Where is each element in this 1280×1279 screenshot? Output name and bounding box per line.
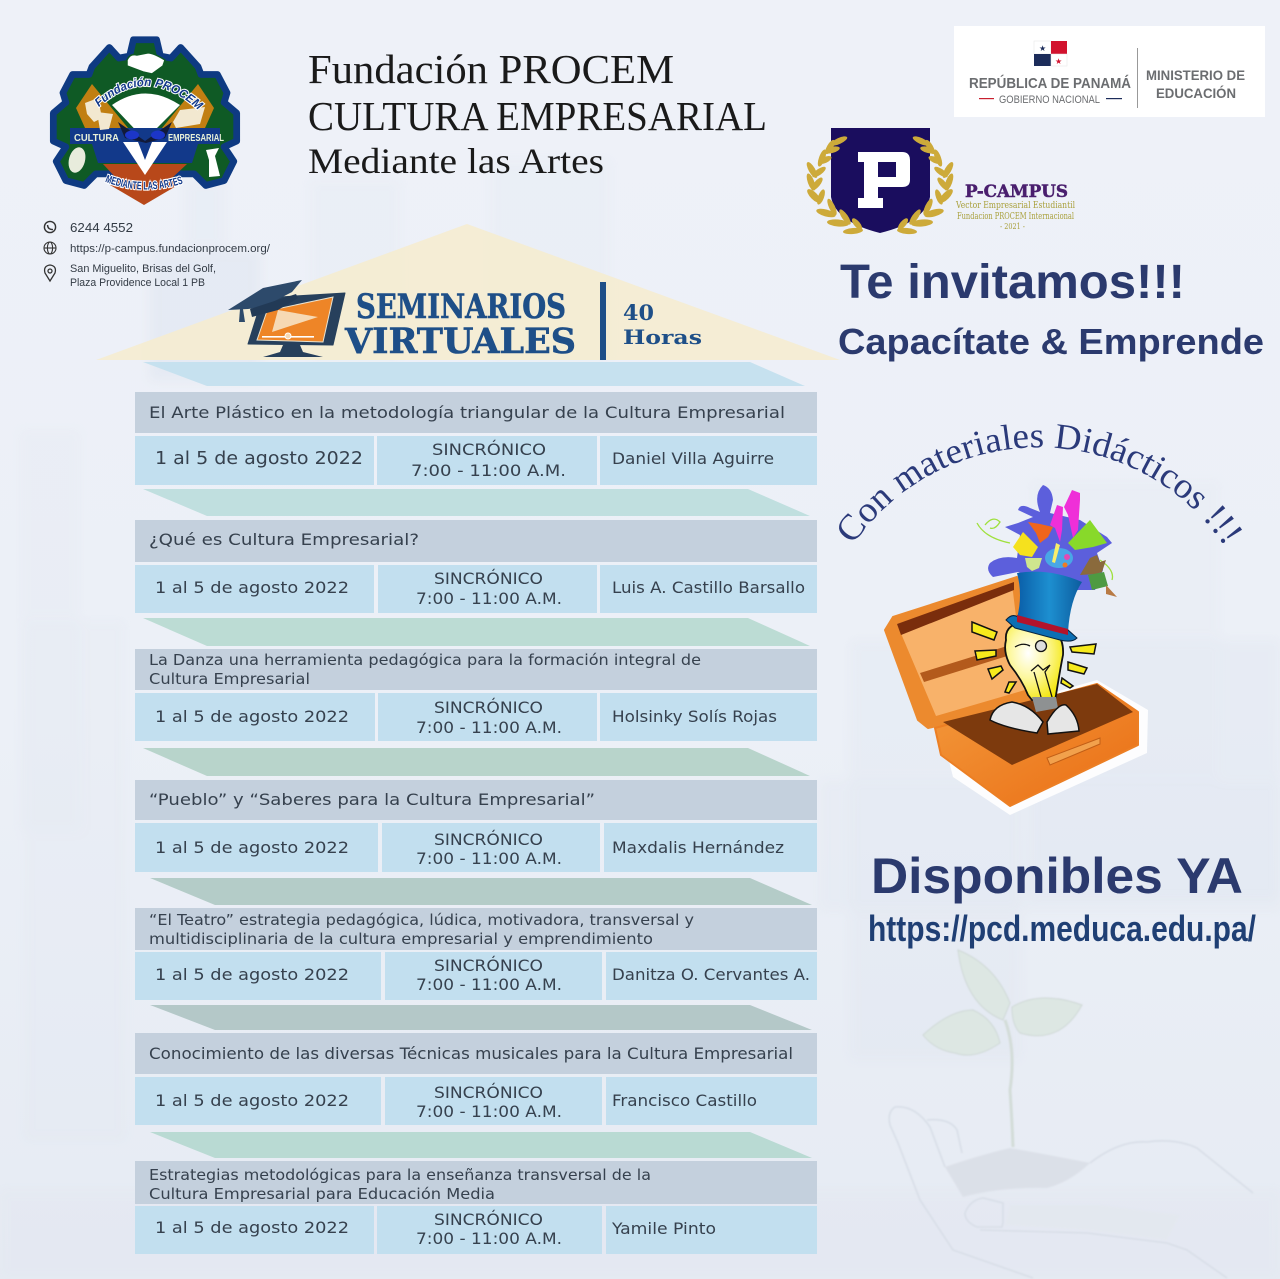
background sprout and hand [889, 950, 1253, 1278]
panel: seminar 1: SINCRÓNICO [432, 440, 546, 459]
white kite [112, 94, 180, 140]
suitcase clasp [1047, 738, 1100, 765]
CULTURA: CULTURA [74, 133, 119, 144]
bulb base [1032, 697, 1058, 712]
panel: seminar 5: “El Teatro” estrategia pedagógica, lúdica, motivadora, transversal y [149, 911, 694, 929]
panel: seminar 6: Conocimiento de las diversas Técnicas musicales para la Cultura Empresarial [149, 1044, 793, 1063]
P-Campus tagline [955, 201, 1075, 231]
roof triangle [96, 224, 840, 360]
panel: seminar 5: multidisciplinaria de la cultura empresarial y emprendimiento [149, 930, 653, 948]
Ministerio de Educación: MINISTERIO DE [1146, 67, 1245, 83]
panel: seminar 1: Daniel Villa Aguirre [612, 449, 774, 468]
panel: seminar 1 [135, 392, 817, 485]
panel: seminar 7: Cultura Empresarial para Educación Media [149, 1185, 495, 1203]
bulb rays [972, 622, 1096, 693]
lightbulb [1005, 622, 1063, 700]
panel: seminar 7: Yamile Pinto [611, 1219, 716, 1238]
letter P [858, 152, 910, 208]
shoes [990, 702, 1079, 734]
logo: Fundación PROCEM [50, 36, 240, 205]
heading: Seminarios Virtuales [344, 287, 576, 362]
screen [257, 297, 333, 342]
monitor frame [248, 293, 345, 345]
suitcase halo [940, 680, 1148, 815]
panel: seminar 2: SINCRÓNICO [434, 569, 543, 588]
heading: Fundación PROCEM: CULTURA EMPRESARIAL [308, 93, 767, 139]
panel: seminar 4: 7:00 - 11:00 A.M. [416, 849, 562, 868]
MEDIANTE LAS ARTES: MEDIANTE LAS ARTES [104, 174, 183, 191]
panel: seminar 3: 7:00 - 11:00 A.M. [416, 718, 562, 737]
panel: seminar 4: 1 al 5 de agosto 2022 [155, 838, 349, 857]
panel: seminar 7: 7:00 - 11:00 A.M. [416, 1229, 562, 1248]
panel: seminar 5: Danitza O. Cervantes A. [612, 965, 810, 984]
panel: seminar 6: Francisco Castillo [612, 1091, 757, 1110]
illustration: suitcase and lightbulb [885, 485, 1148, 815]
panel: seminar 5 [135, 908, 817, 1000]
subheading: Capacítate & Emprende: Capacítate & Emprende [838, 321, 1264, 362]
theatre masks [85, 98, 113, 130]
panel: seminar 3: Holsinky Solís Rojas [612, 707, 777, 726]
heading: Seminarios Virtuales: SEMINARIOS [356, 287, 566, 327]
P-Campus tagline: Vector Empresarial Estudiantil [955, 201, 1075, 211]
music notes [173, 107, 205, 128]
suitcase interior [943, 684, 1133, 765]
lid interior [897, 584, 1025, 716]
hand shading [1005, 1205, 1180, 1240]
heading: Te invitamos: Te invitamos!!! [840, 256, 1185, 309]
Panama flag [1034, 41, 1067, 66]
splash: orange jester [1028, 522, 1053, 543]
panel: seminar 2: Luis A. Castillo Barsallo [612, 578, 805, 597]
EMPRESARIAL: EMPRESARIAL [168, 133, 224, 144]
P-Campus tagline: - 2021 - [1000, 222, 1025, 231]
color splash [977, 485, 1117, 597]
logo: P-Campus [805, 128, 1075, 235]
panel: seminar 5: SINCRÓNICO [434, 956, 543, 975]
ochre triangles [76, 84, 214, 128]
panel: seminar 4 [135, 780, 817, 872]
address: San Miguelito, Brisas del Golf, [70, 263, 216, 275]
play button [272, 310, 318, 332]
splash: purple blob [988, 485, 1112, 590]
palette [66, 145, 88, 175]
graduation cap [228, 280, 302, 310]
band 7 [150, 1132, 812, 1158]
panel: seminar 2 [135, 520, 817, 613]
contact block: Plaza Providence Local 1 PB [70, 277, 205, 289]
hand outline [889, 1107, 1253, 1278]
40 Horas: 40 [623, 300, 654, 325]
splash: pale mask [1025, 558, 1042, 571]
heading: Seminarios Virtuales: VIRTUALES [344, 321, 576, 362]
panel: seminar 2: 7:00 - 11:00 A.M. [416, 589, 562, 608]
suitcase base [935, 684, 1138, 806]
red lower chevron [103, 164, 187, 205]
band 2 [143, 489, 810, 516]
Panama flag: ★ [1055, 57, 1062, 66]
Panama flag: ★ [1039, 44, 1046, 53]
navy band [70, 128, 220, 163]
phone: 6244 4552 [70, 221, 133, 235]
panel: seminar 4: “Pueblo” y “Saberes para la Cultura Empresarial” [149, 790, 595, 809]
Gobierno Nacional: GOBIERNO NACIONAL [999, 94, 1100, 106]
panel: seminar 5: 7:00 - 11:00 A.M. [416, 975, 562, 994]
panel: seminar 6: 7:00 - 11:00 A.M. [416, 1102, 562, 1121]
panel: seminar 5: 1 al 5 de agosto 2022 [155, 965, 349, 984]
panel: seminar 7: 1 al 5 de agosto 2022 [155, 1218, 349, 1237]
panel: seminar 3 [135, 649, 817, 741]
top hat [1006, 572, 1082, 641]
P-CAMPUS wordmark: P-CAMPUS [965, 182, 1068, 202]
gear [53, 40, 237, 185]
panel: seminar 1: 1 al 5 de agosto 2022 [155, 448, 363, 469]
panel: seminar 3: La Danza una herramienta pedagógica para la formación integral de [149, 651, 701, 669]
curved text: Con materiales Didácticos: Con materiales Didácticos !!! [839, 424, 1242, 543]
shield [831, 128, 930, 233]
band 3 [143, 618, 810, 646]
monitor stand [263, 345, 323, 357]
ribbon text Fundación PROCEM: Fundación PROCEM [94, 76, 206, 110]
heading: Fundación PROCEM [308, 46, 767, 181]
band 5 [150, 878, 812, 905]
icon: location pin [45, 265, 55, 281]
40 Horas: Horas [623, 325, 702, 349]
panel: seminar 7 [135, 1161, 817, 1254]
sprout leaves [923, 950, 1082, 1055]
band 6 [150, 1005, 812, 1030]
laurel [805, 134, 955, 235]
panel: seminar 3: SINCRÓNICO [434, 698, 543, 717]
owl face [123, 142, 167, 175]
splash: dancer girl [1080, 555, 1117, 597]
P-Campus tagline: Fundacion PROCEM Internacional [957, 212, 1074, 222]
República de Panamá: REPÚBLICA DE PANAMÁ [969, 74, 1131, 92]
divider bar [600, 282, 606, 360]
splash: palette [1045, 543, 1073, 568]
dancer [206, 148, 220, 177]
panel: seminar 7: SINCRÓNICO [434, 1210, 543, 1229]
panel: seminar 2: ¿Qué es Cultura Empresarial? [149, 530, 419, 549]
handshake icon [127, 53, 165, 74]
panel: seminar 6: 1 al 5 de agosto 2022 [155, 1091, 349, 1110]
band 4 [143, 748, 810, 776]
website: https://p-campus.fundacionprocem.org/ [70, 243, 271, 255]
panel: seminar 4: SINCRÓNICO [434, 830, 543, 849]
panel: seminar 4: Maxdalis Hernández [612, 838, 784, 857]
splash: magenta dancers [1050, 490, 1080, 542]
panel: seminar 1: 7:00 - 11:00 A.M. [411, 461, 566, 480]
heading: Disponibles YA: Disponibles YA [871, 848, 1243, 904]
bulb details [1015, 640, 1052, 697]
contact block [44, 221, 271, 289]
splash: yellow mask [1013, 532, 1038, 557]
icon: online-class monitor [228, 280, 345, 357]
suitcase lid [885, 577, 1058, 728]
panel: seminar 6: SINCRÓNICO [434, 1083, 543, 1102]
splash: green piano [1068, 520, 1107, 550]
panel: seminar 1: El Arte Plástico en la metodología triangular de la Cultura Empresarial [149, 403, 785, 422]
icon: whatsapp [44, 221, 56, 233]
40 Horas [623, 300, 702, 349]
panel: seminar 3: 1 al 5 de agosto 2022 [155, 707, 349, 726]
heading: Fundación PROCEM: Mediante las Artes [308, 141, 604, 181]
splash: green swirls [977, 519, 1112, 580]
panel: seminar 3: Cultura Empresarial [149, 670, 310, 688]
logo: Ministerio de Educación: EDUCACIÓN [1156, 84, 1236, 101]
logo: Ministerio de Educación [954, 26, 1265, 117]
heading: Fundación PROCEM: Fundación PROCEM [308, 46, 674, 92]
icon: globe [44, 242, 56, 254]
panel: seminar 2: 1 al 5 de agosto 2022 [155, 578, 349, 597]
panel: seminar 7: Estrategias metodológicas para la enseñanza transversal de la [149, 1166, 651, 1184]
soil [945, 1148, 1090, 1197]
sprout stem [1005, 1020, 1013, 1147]
panel: seminar 6 [135, 1033, 817, 1125]
roof band 1 [143, 362, 805, 386]
